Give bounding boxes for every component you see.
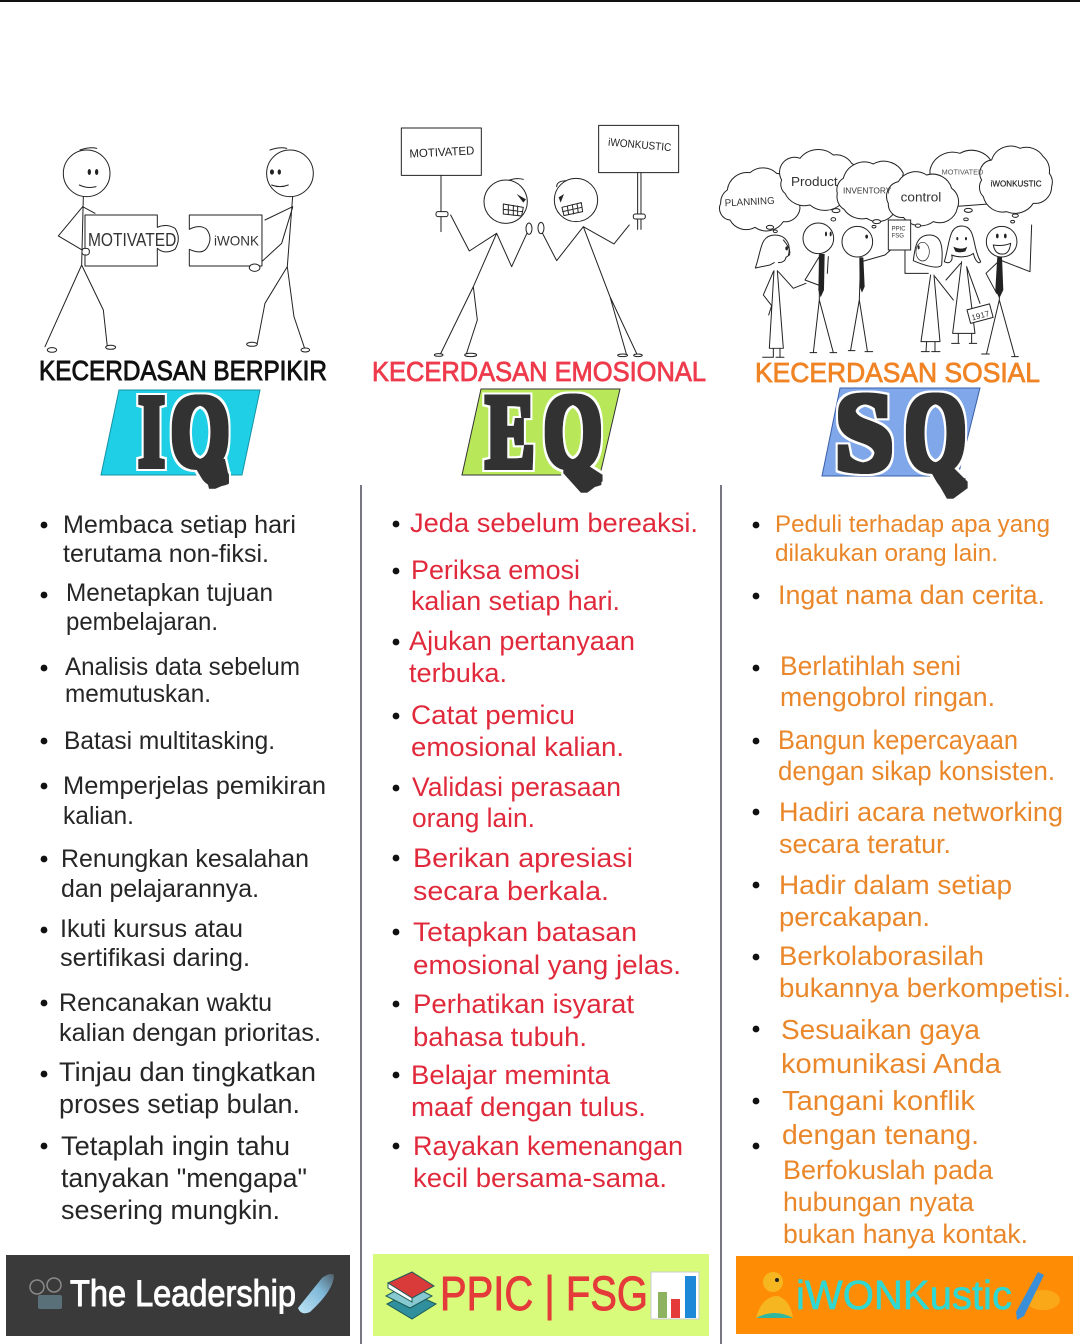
text block: EQ tips: emosional kalian. — [411, 732, 624, 762]
text block: EQ tips: Tetapkan batasan — [413, 917, 637, 947]
text block: SQ tips: Berlatihlah seni — [780, 651, 961, 681]
illustration: two stick figures joining puzzle pieces: iWONK — [214, 233, 260, 249]
text block: IQ tips: Menetapkan tujuan — [66, 579, 273, 607]
text block: IQ tips: proses setiap bulan. — [59, 1089, 300, 1119]
text block: IQ tips: Membaca setiap hari — [63, 511, 296, 539]
icon: film projector — [30, 1278, 62, 1309]
logo: IQ: I — [139, 373, 164, 489]
text block: SQ tips: Sesuaikan gaya — [781, 1014, 980, 1045]
text block: IQ tips: Tinjau dan tingkatkan — [59, 1057, 316, 1087]
illustration: group of stick figures with thought clouds: MOTIVATED — [942, 168, 984, 177]
logo: IQ: Q — [171, 373, 229, 489]
footer banner: The Leadership: The Leadership — [70, 1273, 296, 1314]
text block: IQ tips: Batasi multitasking. — [64, 727, 275, 755]
text block: SQ tips: dengan sikap konsisten. — [778, 756, 1055, 786]
footer banner: iWONKustic: iWONKustic — [796, 1272, 1012, 1318]
panel: IQ column — [6, 148, 350, 1336]
footer banner: PPIC | FSG — [373, 1254, 709, 1336]
text block: SQ tips: dilakukan orang lain. — [775, 540, 998, 567]
icon: comet pencil — [298, 1274, 334, 1313]
text block: SQ tips: Bangun kepercayaan — [778, 725, 1018, 755]
text block: SQ tips: Tangani konflik — [782, 1085, 976, 1116]
text block: EQ tips: kalian setiap hari. — [411, 586, 620, 616]
text block: EQ tips: Ajukan pertanyaan — [409, 626, 635, 656]
illustration: two arguing stick figures with signs: MOTIVATED — [409, 144, 475, 161]
illustration: group of stick figures with thought clouds — [720, 146, 1052, 357]
text block: EQ tips: emosional yang jelas. — [413, 950, 681, 980]
illustration: group of stick figures with thought clouds: FSG — [892, 233, 904, 239]
illustration: two stick figures joining puzzle pieces: MOTIVATED — [88, 229, 176, 250]
text block: IQ tips: sertifikasi daring. — [60, 944, 250, 972]
text block: SQ tips: hubungan nyata — [783, 1187, 975, 1217]
text block: SQ tips: Hadir dalam setiap — [779, 870, 1012, 900]
logo: SQ — [822, 370, 980, 496]
text block: EQ tips: maaf dengan tulus. — [411, 1092, 646, 1122]
illustration: group of stick figures with thought clouds: control — [901, 191, 941, 205]
illustration: group of stick figures with thought clouds: INVENTORY — [843, 185, 892, 195]
icon: bar chart — [651, 1272, 699, 1319]
icon: pencil and hand — [1016, 1272, 1060, 1320]
illustration: group of stick figures with thought clouds: 1917 — [970, 309, 991, 322]
text block: IQ tips: memutuskan. — [65, 680, 211, 708]
logo: SQ: Q — [905, 370, 966, 494]
logo: IQ — [101, 373, 260, 489]
text block: SQ tips: Berkolaborasilah — [779, 941, 984, 971]
text block: IQ tips: pembelajaran. — [66, 608, 218, 636]
text block: SQ tips: Peduli terhadap apa yang — [775, 511, 1050, 538]
text block: IQ tips: kalian dengan prioritas. — [59, 1019, 321, 1047]
text block: IQ tips: sesering mungkin. — [61, 1195, 280, 1225]
text block: IQ tips: Tetaplah ingin tahu — [61, 1131, 290, 1161]
logo: SQ: S — [835, 370, 894, 495]
text block: EQ tips: Belajar meminta — [411, 1060, 611, 1090]
text block: IQ tips: Renungkan kesalahan — [61, 845, 309, 873]
text block: IQ tips — [41, 511, 326, 1225]
text block: EQ tips: secara berkala. — [413, 876, 609, 906]
footer banner: iWONKustic — [736, 1256, 1073, 1334]
text block: IQ tips: Memperjelas pemikiran — [63, 772, 326, 800]
text block: EQ tips: orang lain. — [412, 803, 535, 833]
panel: SQ column — [720, 146, 1073, 1334]
text block: IQ tips: dan pelajarannya. — [61, 875, 259, 903]
heading: Kecerdasan Berpikir: KECERDASAN BERPIKIR — [39, 355, 327, 386]
text block: EQ tips: Perhatikan isyarat — [413, 989, 635, 1019]
footer banner: The Leadership — [6, 1255, 350, 1336]
text block: IQ tips: kalian. — [63, 802, 134, 830]
text block: EQ tips: kecil bersama-sama. — [413, 1163, 667, 1193]
logo: EQ: Q — [544, 372, 602, 490]
text block: EQ tips: Validasi perasaan — [412, 772, 621, 802]
icon: stack of books — [386, 1272, 436, 1319]
text block: EQ tips: Periksa emosi — [411, 555, 580, 585]
illustration: group of stick figures with thought clouds: iWONKUSTIC — [991, 179, 1042, 189]
text block: SQ tips: Ingat nama dan cerita. — [778, 580, 1045, 610]
text block: EQ tips: terbuka. — [409, 658, 507, 688]
logo: EQ: E — [486, 372, 534, 490]
text block: SQ tips: bukannya berkompetisi. — [779, 973, 1071, 1003]
text block: SQ tips: mengobrol ringan. — [780, 682, 995, 712]
text block: IQ tips: Rencanakan waktu — [59, 989, 272, 1017]
logo: EQ — [462, 372, 620, 490]
text block: EQ tips: bahasa tubuh. — [413, 1022, 587, 1052]
text block: EQ tips: Rayakan kemenangan — [413, 1131, 683, 1161]
text block: IQ tips: tanyakan "mengapa" — [61, 1163, 307, 1193]
text block: IQ tips: Ikuti kursus atau — [60, 915, 243, 943]
text block: SQ tips: dengan tenang. — [782, 1119, 979, 1150]
panel: EQ column — [372, 125, 709, 1336]
illustration: two arguing stick figures with signs: iWONKUSTIC — [608, 137, 672, 154]
text block: IQ tips: Analisis data sebelum — [65, 653, 300, 681]
text block: SQ tips: Hadiri acara networking — [779, 797, 1063, 827]
illustration: two arguing stick figures with signs — [401, 125, 679, 357]
text block: EQ tips — [393, 508, 698, 1193]
text block: EQ tips: Jeda sebelum bereaksi. — [410, 508, 698, 538]
text block: SQ tips: percakapan. — [779, 902, 930, 932]
illustration: group of stick figures with thought clouds: PPIC — [892, 227, 906, 233]
text block: SQ tips: komunikasi Anda — [781, 1048, 1001, 1079]
icon: person bowing — [756, 1272, 793, 1318]
text block: EQ tips: Catat pemicu — [411, 700, 575, 730]
text block: IQ tips: terutama non-fiksi. — [63, 540, 269, 568]
text block: SQ tips: bukan hanya kontak. — [783, 1219, 1028, 1249]
heading: Kecerdasan Sosial: KECERDASAN SOSIAL — [755, 357, 1040, 388]
illustration: two stick figures joining puzzle pieces — [45, 148, 313, 352]
text block: EQ tips: Berikan apresiasi — [413, 843, 633, 873]
illustration: group of stick figures with thought clouds: PLANNING — [724, 196, 775, 209]
footer banner: PPIC | FSG: PPIC | FSG — [440, 1268, 648, 1321]
text block: SQ tips: secara teratur. — [779, 829, 951, 859]
text block: SQ tips — [753, 511, 1071, 1249]
illustration: group of stick figures with thought clouds: Product — [791, 174, 838, 189]
text block: SQ tips: Berfokuslah pada — [783, 1155, 994, 1185]
heading: Kecerdasan Emosional: KECERDASAN EMOSIONAL — [372, 356, 706, 387]
